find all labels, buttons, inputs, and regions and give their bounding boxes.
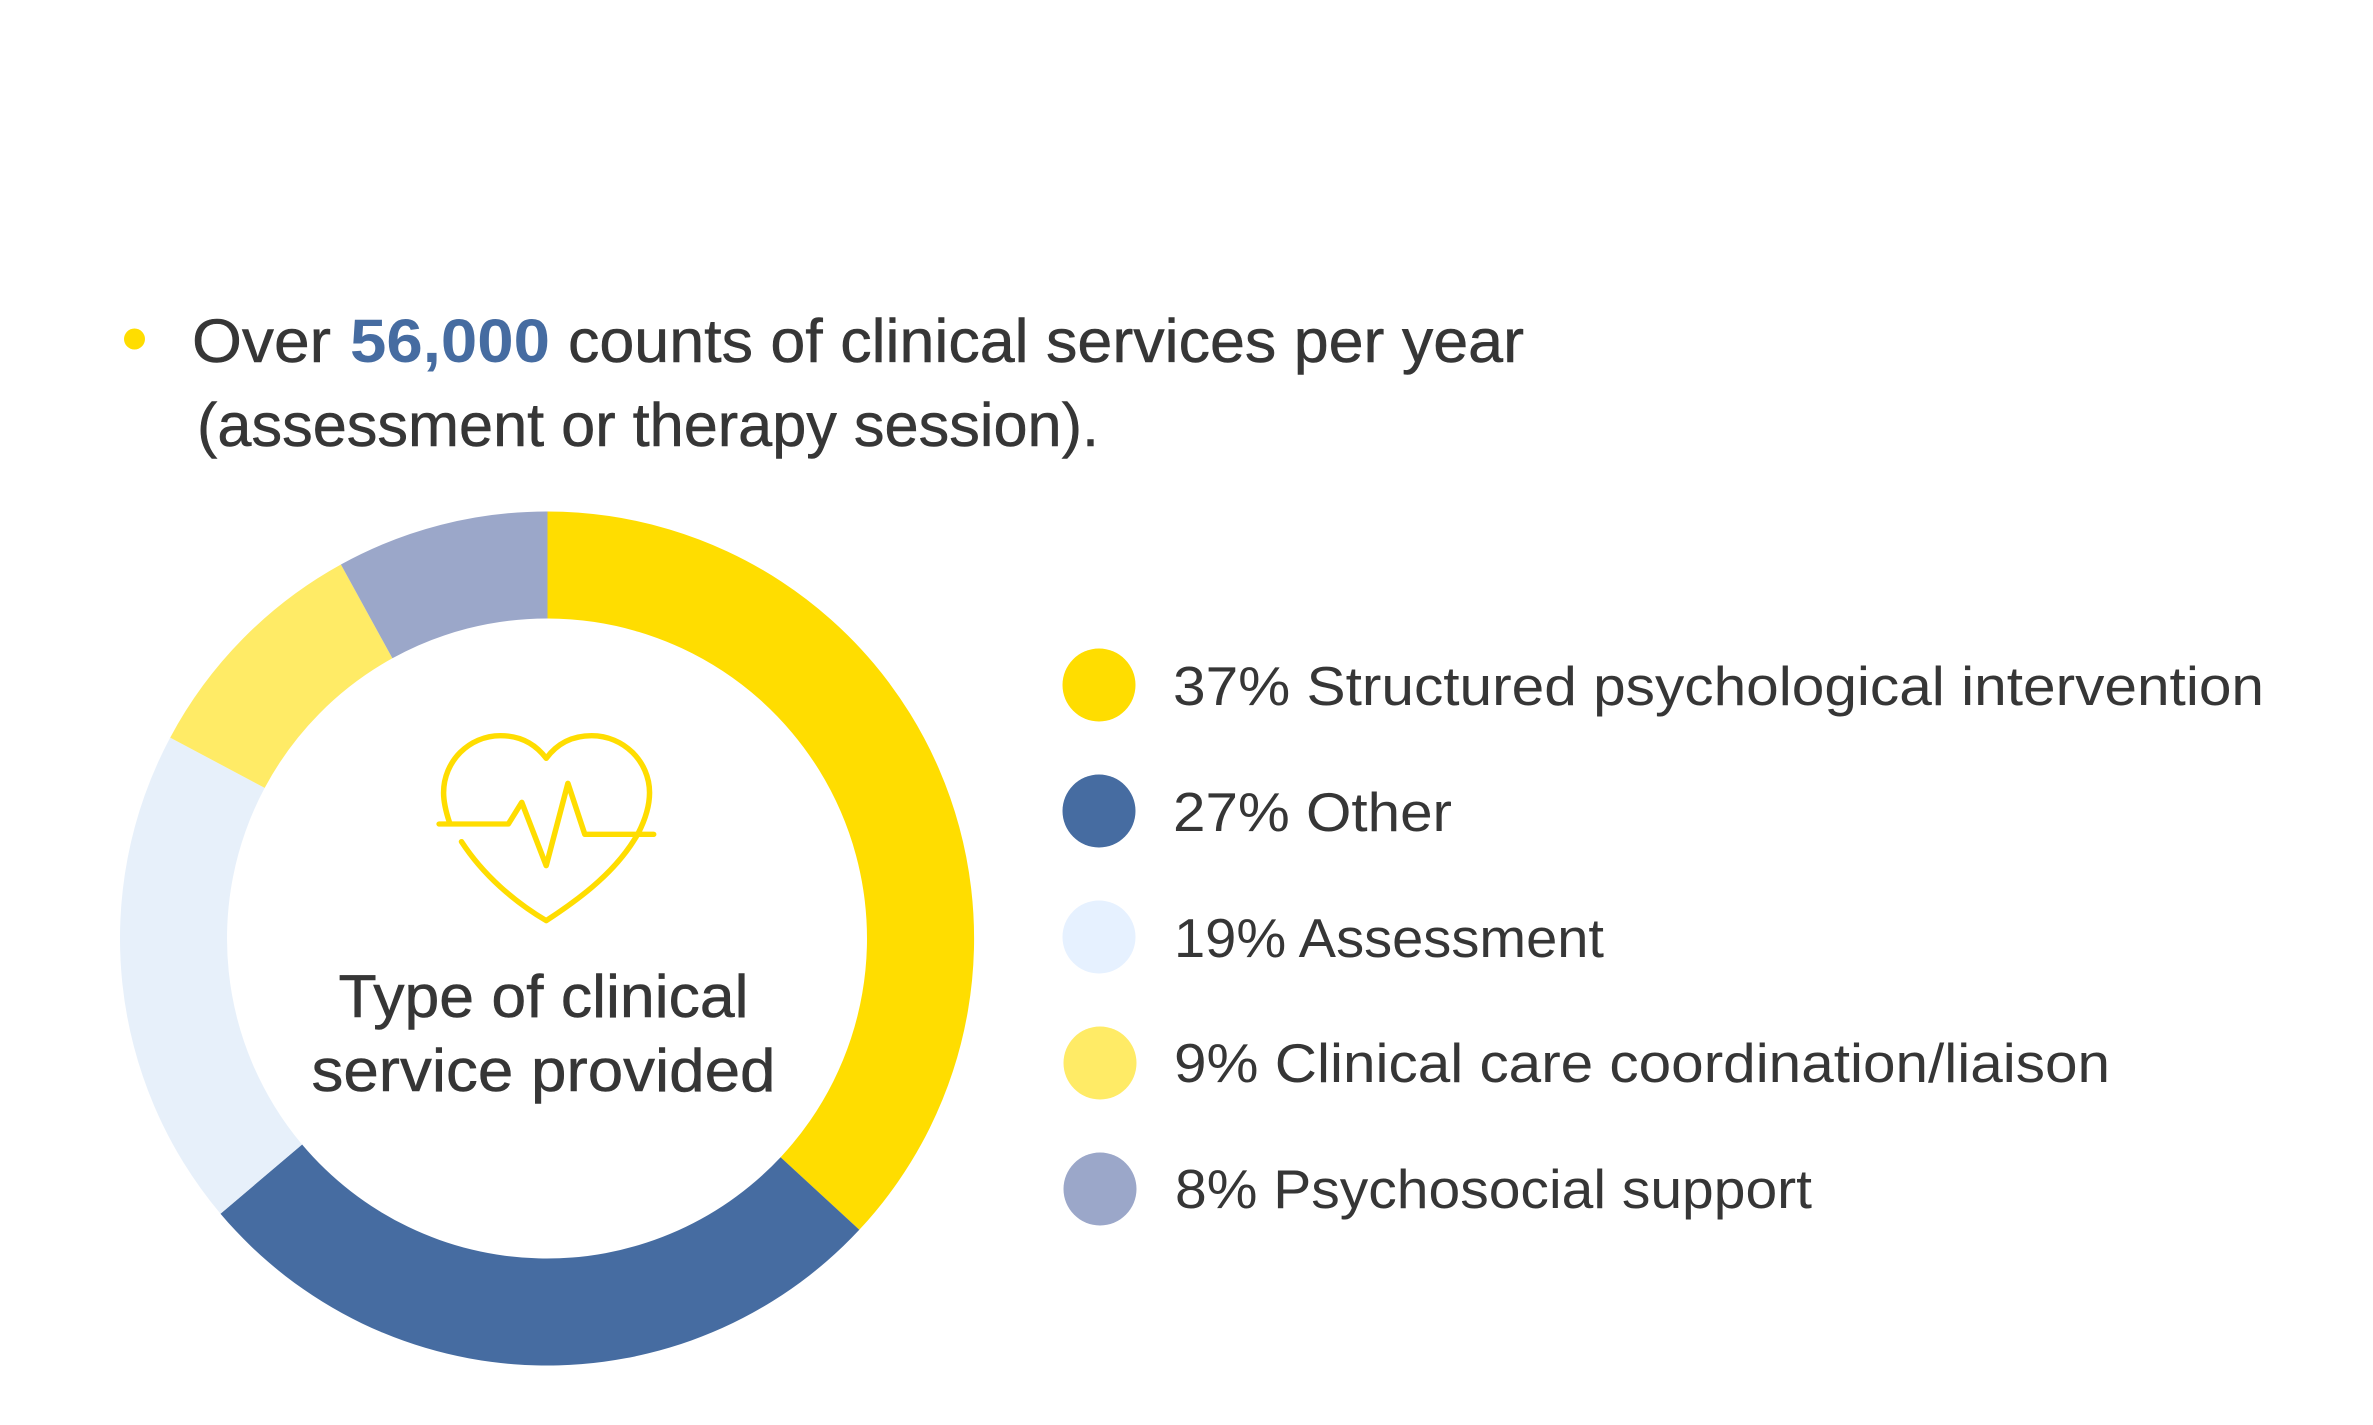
text: over: Over — [192, 307, 331, 375]
segment: 8% psychosocial support — [341, 511, 548, 658]
segment: 9% clinical care coordination — [170, 564, 392, 788]
legend item: 19% — [1062, 900, 1604, 974]
segment: 27% other — [220, 1144, 859, 1366]
legend item: 8% — [1064, 1152, 1812, 1226]
legend item: 8%: 8% Psychosocial support — [1175, 1158, 1812, 1220]
donut centre label: Type of clinical — [338, 963, 748, 1030]
legend item: 19%: 19% Assessment — [1174, 907, 1604, 969]
icon: heart with heartbeat line — [439, 736, 654, 921]
segment: 19% assessment — [120, 738, 302, 1214]
legend item: 27% — [1062, 774, 1452, 848]
text: counts per year: counts of clinical services per year — [568, 307, 1524, 375]
legend item: 37%: 37% Structured psychological intervention — [1173, 655, 2264, 717]
text: assessment or therapy session: (assessment or therapy session). — [197, 391, 1099, 459]
highlighted number: 56,000: 56,000 — [350, 307, 550, 375]
legend item: 9%: 9% Clinical care coordination/liaison — [1174, 1032, 2110, 1094]
donut centre label — [312, 963, 776, 1104]
icon: yellow bullet — [124, 328, 145, 350]
donut centre label: service provided — [312, 1037, 776, 1104]
donut chart — [120, 511, 974, 1366]
legend — [1062, 648, 2264, 1226]
segment: 37% structured psychological intervention — [548, 512, 974, 1230]
bullet statement — [124, 307, 1524, 459]
legend item: 27%: 27% Other — [1173, 781, 1452, 843]
